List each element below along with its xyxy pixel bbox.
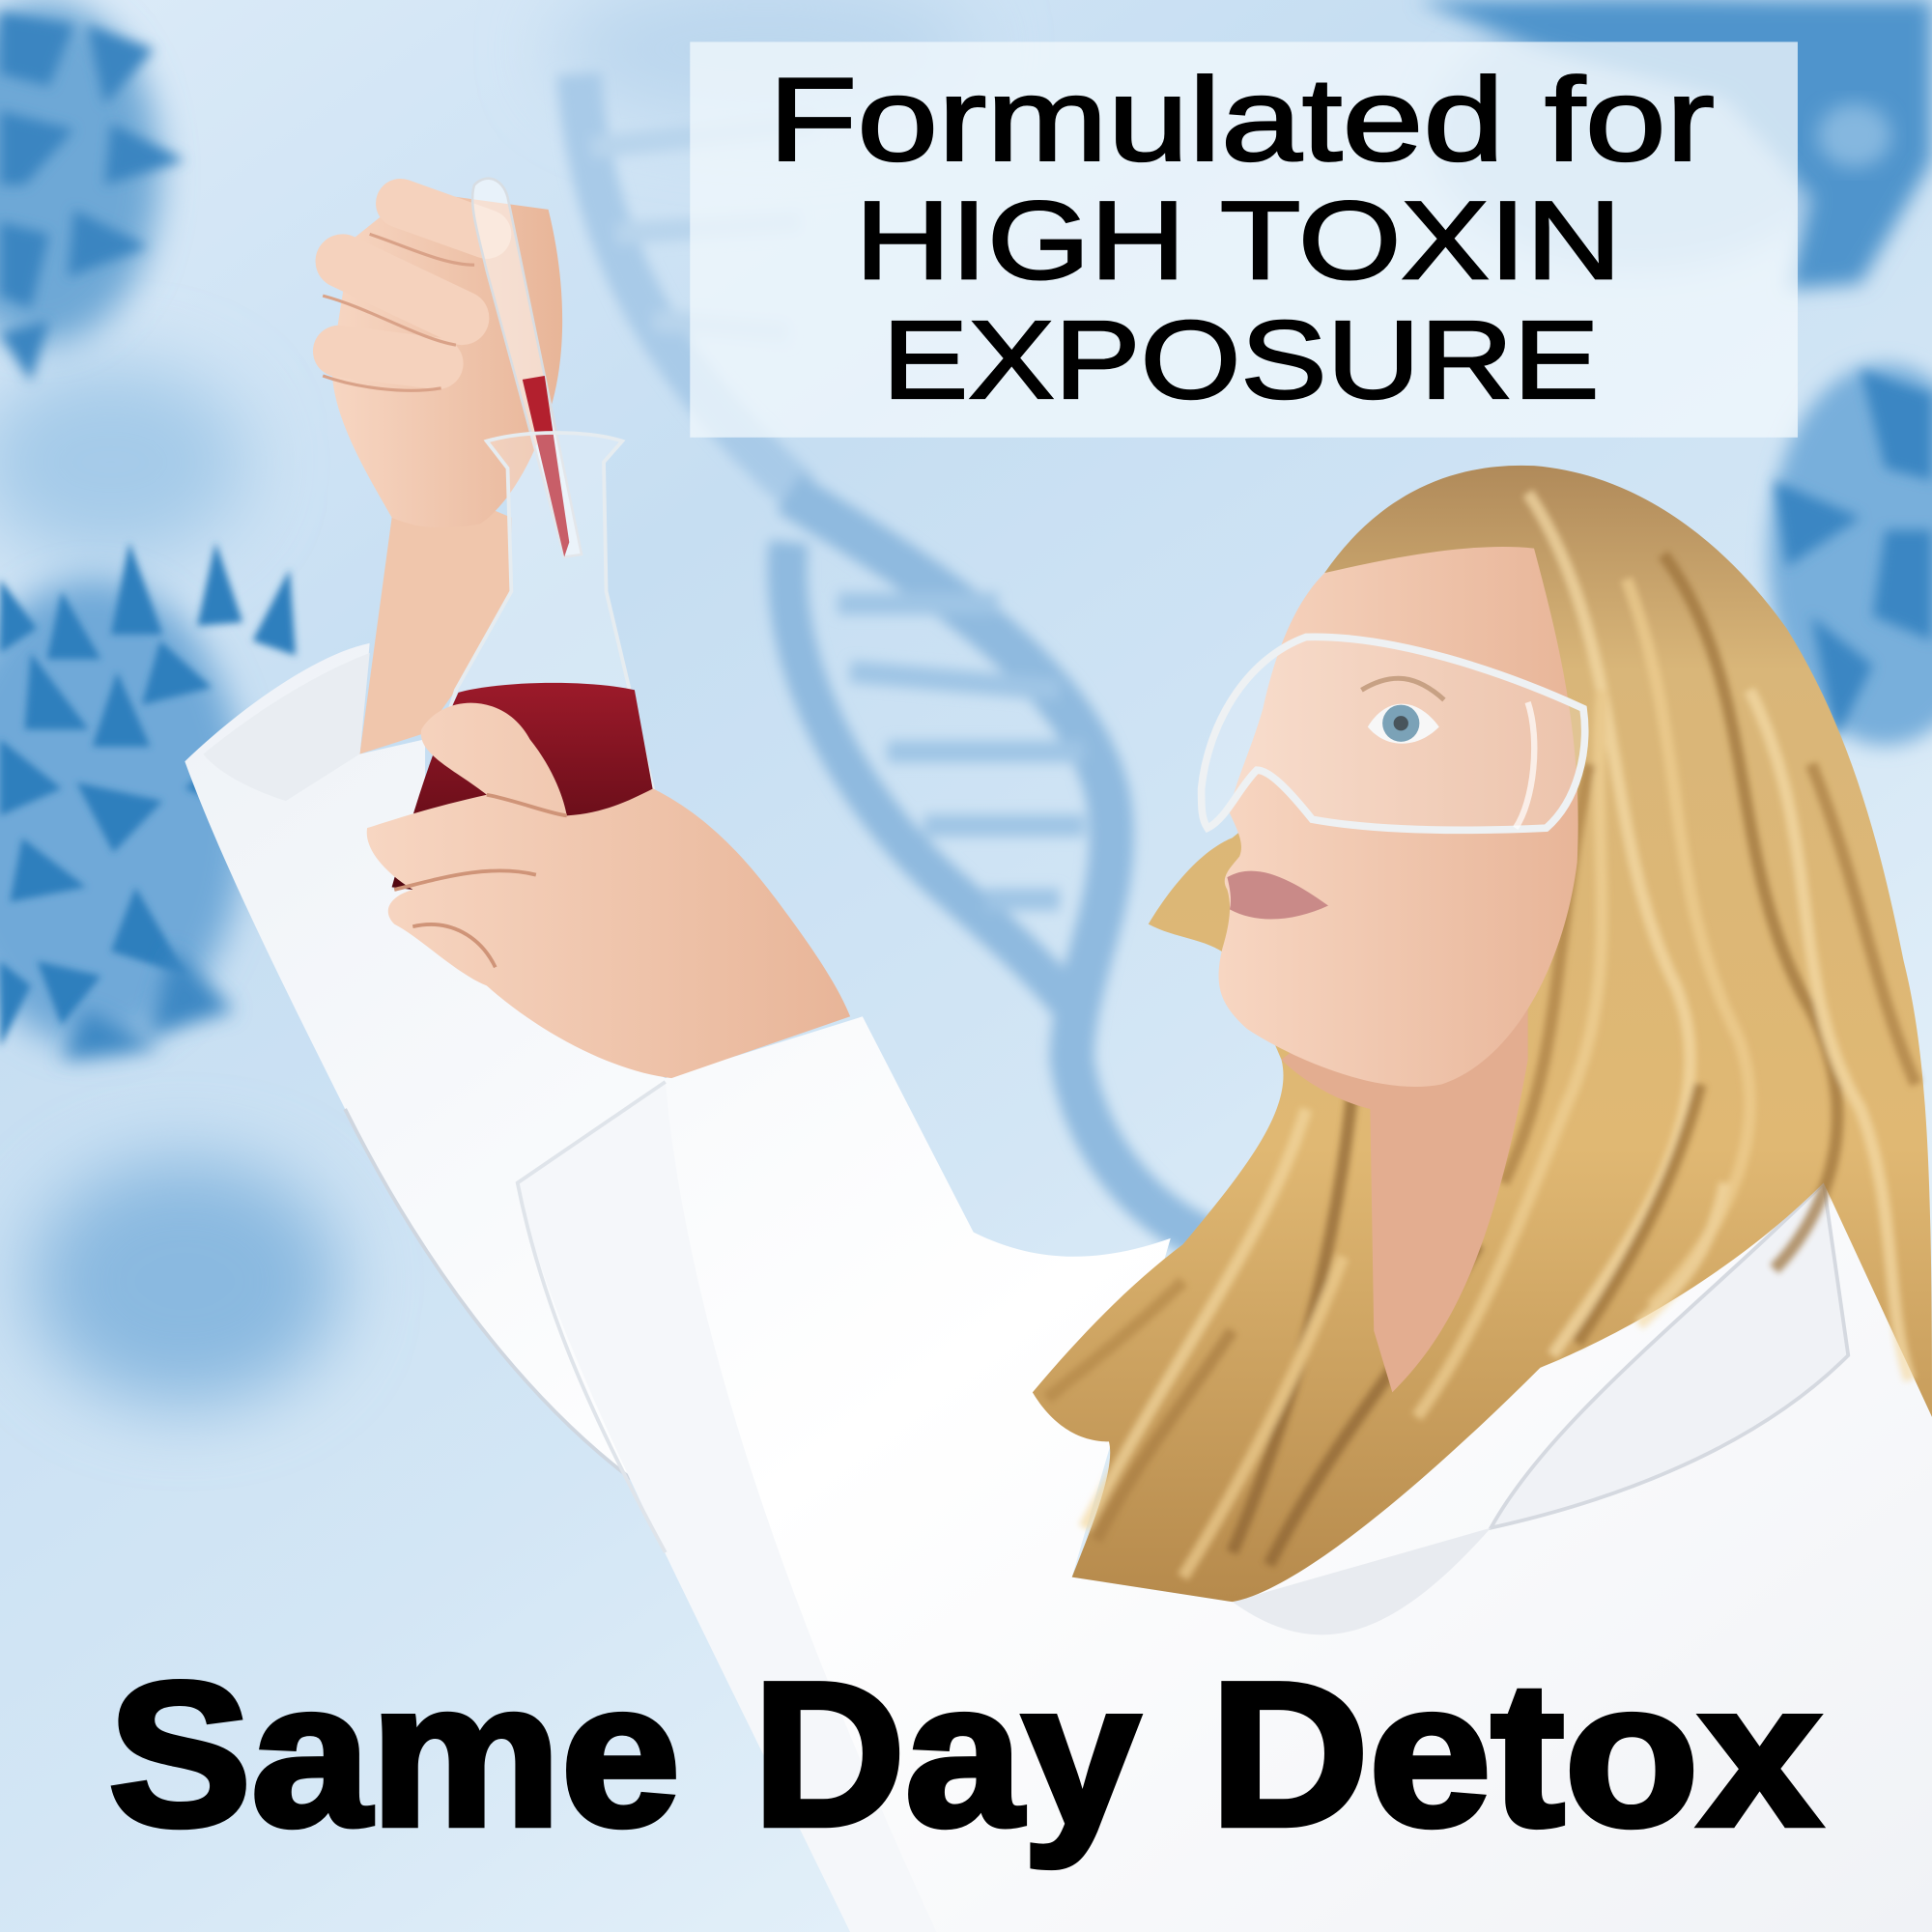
- hand holding flask: [367, 703, 850, 1078]
- text box: formulated for high toxin exposure: Formulated for: [768, 53, 1715, 185]
- cuff opening: [203, 653, 370, 801]
- title: same day detox: Detox: [1210, 1639, 1821, 1868]
- safety goggles: [1202, 637, 1585, 830]
- eye: [1361, 678, 1444, 744]
- red liquid: [392, 683, 653, 899]
- fingers: [339, 203, 487, 363]
- text box: formulated for high toxin exposure: EXPOSURE: [882, 298, 1600, 422]
- sleeve shadow: [518, 1082, 936, 1932]
- hair strands: [1047, 493, 1916, 1577]
- title: same day detox: [108, 1639, 1821, 1868]
- hair: [1033, 466, 1932, 1602]
- title: same day detox: Same: [108, 1639, 680, 1868]
- virus: right edge: [1768, 363, 1932, 746]
- virus: top left: [0, 0, 185, 382]
- dna helix: [579, 74, 1220, 1244]
- collar: [1491, 1182, 1848, 1528]
- text box: formulated for high toxin exposure: [690, 42, 1798, 438]
- virus: top right: [1417, 0, 1932, 290]
- lab coat: [185, 643, 1932, 1932]
- background: soft blurred cells: [0, 0, 974, 1405]
- raised forearm and hand: [323, 191, 562, 754]
- text box: formulated for high toxin exposure: HIGH TOXIN: [855, 179, 1622, 302]
- virus: left spiky: [0, 542, 296, 1060]
- glass flask: [392, 433, 653, 899]
- title: same day detox: Day: [753, 1639, 1140, 1868]
- face and neck: [1219, 547, 1578, 1392]
- pipette: [472, 179, 582, 557]
- lips: [1227, 871, 1328, 919]
